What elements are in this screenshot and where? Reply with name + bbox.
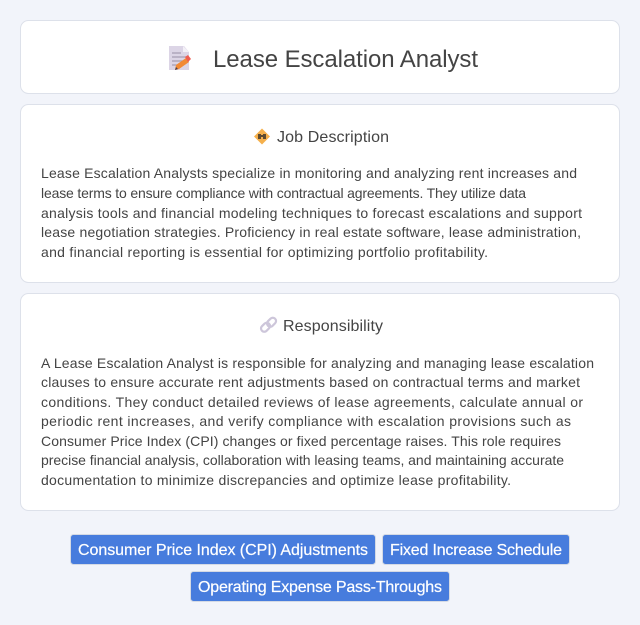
text block: responsibility: A Lease Escalation Analyst is responsible for analyzing and managing lease escalation xyxy=(41,355,594,371)
text block: responsibility: documentation to minimize discrepancies and optimize lease profitability. xyxy=(41,472,511,488)
text block: job description: Lease Escalation Analysts specialize in monitoring and analyzing rent increases and xyxy=(41,165,577,181)
icon: orange diamond xyxy=(254,128,270,144)
tag: operating expense pass-throughs xyxy=(190,572,450,602)
text block: responsibility: precise financial analysis, collaboration with leasing teams, and maintaining accurate xyxy=(41,452,564,468)
tag: consumer price index adjustments xyxy=(70,534,376,564)
tag: fixed increase schedule: Fixed Increase Schedule xyxy=(390,542,562,559)
text block: job description: lease negotiation strategies. Proficiency in real estate software, lease administration, xyxy=(41,224,581,240)
text block: job description: lease terms to ensure compliance with contractual agreements. They utilize data xyxy=(41,185,526,201)
icon: chain link xyxy=(260,316,277,333)
text block: job description: and financial reporting is essential for optimizing portfolio profitability. xyxy=(41,244,488,260)
text block: responsibility: periodic rent increases, and verify compliance with escalation provisions such as xyxy=(41,413,571,429)
text block: responsibility xyxy=(41,355,594,488)
tag: fixed increase schedule xyxy=(382,534,570,564)
title: Lease Escalation Analyst xyxy=(213,46,478,73)
heading: job description: Job Description xyxy=(277,129,389,146)
text block: responsibility: Consumer Price Index (CPI) changes or fixed percentage raises. This role requires xyxy=(41,433,561,449)
text block: job description xyxy=(41,165,582,260)
text block: responsibility: clauses to ensure accurate rent adjustments based on contractual terms and market xyxy=(41,374,580,390)
heading: responsibility: Responsibility xyxy=(283,318,383,335)
tag: consumer price index adjustments: Consumer Price Index (CPI) Adjustments xyxy=(78,542,368,559)
icon: document with pencil xyxy=(169,46,191,70)
panel: title card xyxy=(20,20,620,94)
panel: responsibility xyxy=(20,294,620,510)
text block: responsibility: conditions. They conduct detailed reviews of lease agreements, calculate annual or xyxy=(41,394,583,410)
panel: job description xyxy=(20,104,620,282)
tag: operating expense pass-throughs: Operating Expense Pass-Throughs xyxy=(198,579,442,596)
text block: job description: analysis tools and financial modeling techniques to forecast escalations and support xyxy=(41,205,582,221)
